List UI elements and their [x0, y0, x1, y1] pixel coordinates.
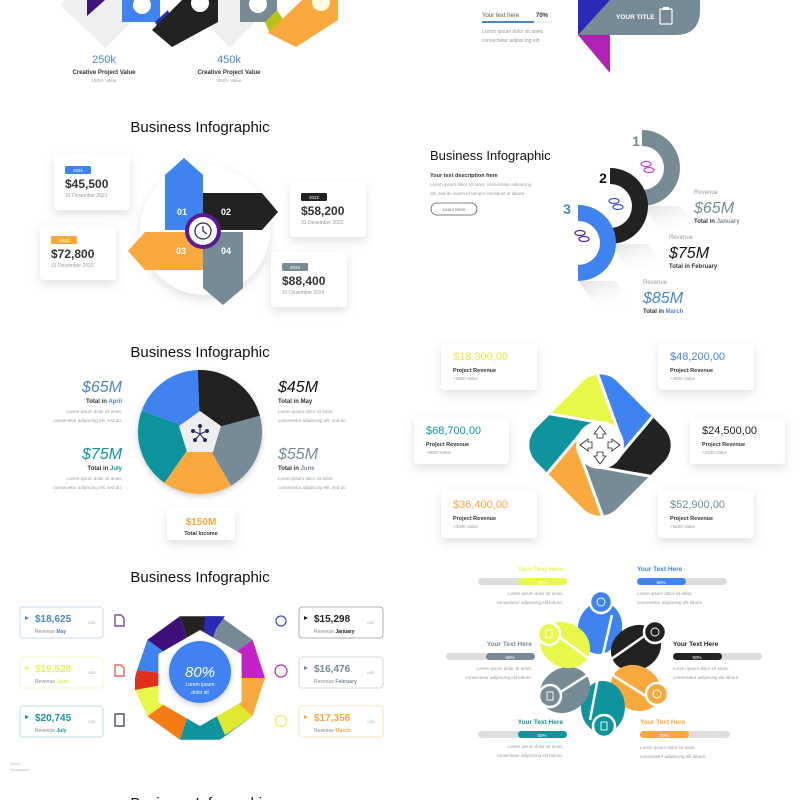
people [531, 599, 670, 733]
description: Your text description here [430, 173, 498, 179]
text top-right: Your Text Here [637, 566, 683, 573]
right labels: Total in May [278, 399, 313, 405]
heading: Business Infographic [130, 119, 270, 136]
card teal: +6800 Value [426, 450, 452, 455]
pie [138, 370, 262, 494]
text bottom-right: consectetur adipiscing elit labore. [640, 754, 707, 759]
text top-left: Your Text Here [518, 566, 563, 573]
card may: Revenue May [35, 629, 66, 635]
panel: pinwheel timeline [40, 119, 366, 307]
total card [167, 508, 235, 540]
icons side [115, 615, 287, 726]
center circle: Lorem ipsum [186, 682, 214, 688]
footer: Metro [10, 761, 21, 766]
center circle: dolor sit [191, 690, 209, 696]
card june: USD [88, 671, 96, 675]
text top-right: Lorem ipsum dolor sit amet, [637, 591, 693, 596]
panel: top-right title banner [482, 0, 700, 73]
text bottom-left: consectetur adipiscing elit labore. [496, 753, 563, 758]
card 2022: 2022 [309, 195, 320, 200]
icon: clock [185, 213, 221, 249]
text bottom-left: Your Text Here [518, 719, 563, 726]
text bottom-right: Your Text Here [640, 719, 686, 726]
card orange [441, 490, 537, 538]
text bottom-left: Lorem ipsum dolor sit amet, [507, 744, 563, 749]
card january: Revenue January [314, 629, 355, 635]
card black: Project Revenue [702, 442, 745, 448]
decagon [135, 616, 265, 740]
card gray: +5200 Value [670, 524, 696, 529]
left labels: $65M [81, 379, 123, 396]
card march: USD [367, 720, 375, 724]
card 2023: 2023 [59, 238, 70, 243]
center circle: 80% [185, 664, 215, 681]
panel: team circle [446, 566, 762, 759]
card yellow [441, 343, 537, 390]
right labels: consectetur adipiscing elit, sed do. [278, 418, 347, 423]
revenue labels: Total in February [669, 264, 718, 270]
card 2021: 2021 [73, 168, 84, 173]
card june [20, 657, 103, 688]
card july [20, 706, 103, 737]
right labels: $55M [277, 446, 319, 463]
card 2024: 2024 [290, 265, 301, 270]
revenue labels: Total in January [694, 219, 740, 225]
card may: $18,625 [35, 614, 72, 625]
text top-left: 50% [537, 580, 547, 585]
text top-left: consectetur adipiscing elit labore. [496, 600, 563, 605]
card teal: $68,700,00 [426, 425, 481, 437]
progress text: consectetur adipiscing elit. [482, 38, 541, 44]
card teal: Project Revenue [426, 442, 469, 448]
card july: $20,745 [35, 713, 72, 724]
card blue: Project Revenue [670, 368, 713, 374]
card july: USD [88, 720, 96, 724]
card 2021: $45,500 [65, 177, 109, 191]
card january: USD [367, 621, 375, 625]
card 2023: $72,800 [51, 247, 95, 261]
card february: $16,476 [314, 664, 351, 675]
revenue labels: $85M [642, 290, 684, 307]
left labels [53, 379, 123, 490]
revenue labels: $75M [668, 245, 710, 262]
left labels: Total in April [86, 399, 122, 405]
heading: Business Infographic [130, 569, 270, 586]
arrows [128, 158, 278, 305]
card february: USD [367, 671, 375, 675]
stat 250k [72, 54, 136, 83]
right labels: Total in June [278, 466, 315, 472]
card february [299, 657, 383, 688]
card blue: $48,200,00 [670, 351, 725, 363]
text bottom-left: 50% [537, 733, 547, 738]
progress text: Lorem ipsum dolor sit amet, [482, 29, 544, 35]
card blue: +4800 Value [670, 376, 696, 381]
card black: +2400 Value [702, 450, 728, 455]
left labels: Total in July [87, 466, 123, 472]
card orange: $36,400,00 [453, 499, 508, 511]
card yellow: +1800 Value [453, 376, 479, 381]
left labels: $75M [81, 446, 123, 463]
text bottom-left [478, 719, 567, 758]
text mid-right: consectetur adipiscing elit labore. [673, 675, 740, 680]
text top-right: consectetur adipiscing elit labore. [637, 600, 704, 605]
footer [10, 761, 30, 772]
text bottom-right: Lorem ipsum dolor sit amet, [640, 745, 696, 750]
revenue labels: Revenue [694, 190, 719, 196]
description: elit, sed do eiusmod tempor incididunt ut labore. [430, 191, 526, 196]
card march [299, 706, 383, 737]
icon: arrows [580, 426, 620, 464]
card yellow: Project Revenue [453, 368, 496, 374]
arrows: 01 [177, 207, 187, 217]
text mid-left [446, 641, 535, 680]
text mid-right [673, 641, 762, 680]
card black [690, 417, 785, 464]
center circle [169, 641, 231, 703]
stat 450k [197, 54, 261, 83]
card orange: Project Revenue [453, 516, 496, 522]
right labels: consectetur adipiscing elit, sed do. [278, 485, 347, 490]
stat 250k: 250k [92, 54, 116, 66]
right labels: $45M [277, 379, 319, 396]
text mid-left: Lorem ipsum dolor sit amet, [476, 666, 532, 671]
stat 450k: 3500+ Value [216, 78, 242, 83]
card june: Revenue June [35, 679, 68, 685]
right labels: Lorem ipsum dolor sit amet, [278, 409, 334, 414]
stat 250k: Creative Project Value [72, 70, 136, 76]
icon: circles [133, 0, 330, 14]
card yellow: $18,300,00 [453, 351, 508, 363]
text top-right [637, 566, 727, 605]
card gray: Project Revenue [670, 516, 713, 522]
text bottom-right: 50% [659, 733, 669, 738]
progress text: Your text here [482, 13, 520, 19]
text mid-left: Your Text Here [487, 641, 532, 648]
left labels: Lorem ipsum dolor sit amet, [66, 476, 122, 481]
card march: $17,358 [314, 713, 351, 724]
rings [563, 130, 700, 305]
card 2022: $58,200 [301, 204, 345, 218]
progress text: 70% [536, 13, 549, 19]
card july: Revenue July [35, 728, 67, 734]
card 2023: 31 Desember 2023 [51, 263, 94, 269]
card black: $24,500,00 [702, 425, 757, 437]
rings: 2 [599, 170, 607, 186]
card may: USD [88, 621, 96, 625]
right labels: Lorem ipsum dolor sit amet, [278, 476, 334, 481]
arrows: 04 [221, 246, 231, 256]
card blue [658, 343, 754, 390]
panel: pie chart [53, 344, 347, 540]
text bottom-right [640, 719, 730, 759]
rings: 3 [563, 201, 571, 217]
panel: top-left arrows [60, 0, 338, 83]
revenue labels: Total in March [643, 309, 684, 315]
revenue labels: Revenue [669, 235, 694, 241]
stat 250k: 1500+ Value [91, 78, 117, 83]
panel: revenue rings [430, 130, 740, 315]
text top-left: Lorem ipsum dolor sit amet, [507, 591, 563, 596]
heading: Business Infographic [430, 148, 551, 163]
left labels: consectetur adipiscing elit, sed do. [53, 485, 122, 490]
card february: Revenue February [314, 679, 357, 685]
card 2021 [54, 155, 130, 210]
card 2023 [40, 225, 116, 280]
left labels: consectetur adipiscing elit, sed do. [53, 418, 122, 423]
stat 450k: 450k [217, 54, 241, 66]
card orange: +3600 Value [453, 524, 479, 529]
text mid-right: Your Text Here [673, 641, 719, 648]
description: Lorem ipsum dolor sit amet, consectetur adipiscing [430, 182, 532, 187]
rings: 1 [632, 133, 640, 149]
progress text [482, 13, 552, 44]
arrows: 02 [221, 207, 231, 217]
stat 450k: Creative Project Value [197, 70, 261, 76]
panel: project revenue diamond [411, 348, 788, 545]
card 2022: 31 Desember 2022 [301, 220, 344, 226]
card may [20, 607, 103, 638]
card 2022 [290, 182, 366, 237]
text top-right: 50% [656, 580, 666, 585]
card june: $19,528 [35, 664, 72, 675]
card 2024 [271, 252, 347, 307]
description: Learn More [442, 207, 466, 212]
card 2024: $88,400 [282, 274, 326, 288]
text top-left [478, 566, 567, 605]
revenue labels [642, 190, 740, 315]
revenue labels: $65M [693, 200, 735, 217]
banner: YOUR TITLE [616, 14, 655, 21]
text mid-left: consectetur adipiscing elit labore. [465, 675, 532, 680]
diamond [529, 374, 671, 516]
card teal [414, 417, 509, 464]
right labels [277, 379, 347, 490]
text mid-left: 50% [505, 655, 515, 660]
description [430, 173, 532, 215]
card january: $15,298 [314, 614, 351, 625]
arrows: 03 [176, 246, 186, 256]
total card: Total Income [184, 531, 218, 537]
banner [578, 0, 700, 73]
card march: Revenue March [314, 728, 350, 734]
text mid-right: 50% [692, 655, 702, 660]
panel: decagon revenue [10, 569, 383, 800]
card gray [658, 490, 754, 538]
card 2021: 31 Desember 2021 [65, 193, 108, 199]
icon: network [192, 424, 208, 442]
total card: $150M [186, 517, 216, 528]
heading: Business Infographic [130, 344, 270, 361]
icon circles [538, 591, 668, 737]
card 2024: 31 Desember 2024 [282, 290, 325, 296]
footer: Infographic [10, 767, 30, 772]
card january [299, 607, 383, 638]
left labels: Lorem ipsum dolor sit amet, [66, 409, 122, 414]
card gray: $52,900,00 [670, 499, 725, 511]
icon: coins [575, 162, 654, 242]
text mid-right: Lorem ipsum dolor sit amet, [673, 666, 729, 671]
revenue labels: Revenue [643, 280, 668, 286]
